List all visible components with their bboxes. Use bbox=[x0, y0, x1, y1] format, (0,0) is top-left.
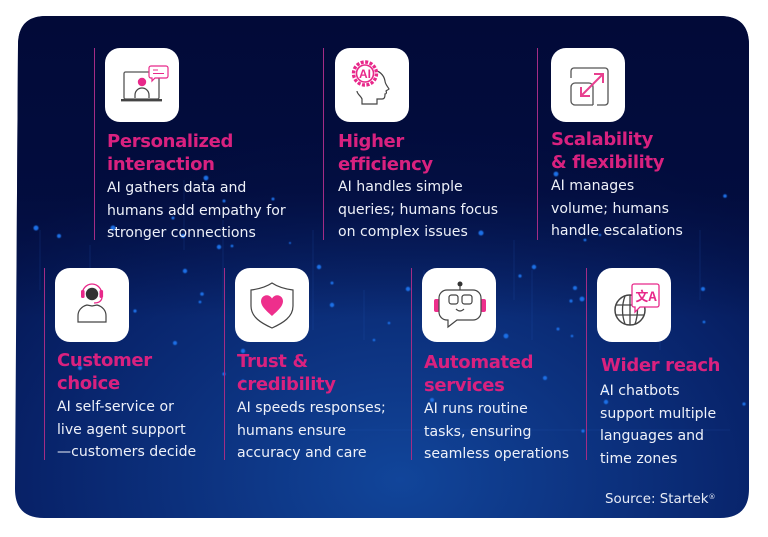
heading: efficiency bbox=[338, 154, 433, 175]
description: time zones bbox=[600, 451, 677, 467]
description bbox=[338, 179, 498, 240]
description: AI manages bbox=[551, 178, 634, 194]
icon: resize arrows bbox=[551, 48, 625, 122]
icon: globe translate bbox=[597, 268, 671, 342]
description bbox=[57, 399, 196, 460]
description: —customers decide bbox=[57, 444, 196, 460]
item: automated services bbox=[411, 268, 569, 462]
description: AI self-service or bbox=[57, 399, 174, 415]
heading bbox=[107, 131, 233, 175]
icon: chatbot bbox=[422, 268, 496, 342]
item: personalized interaction bbox=[94, 48, 286, 241]
heading: Wider reach bbox=[601, 355, 720, 376]
heading: choice bbox=[57, 373, 120, 394]
item: wider reach bbox=[586, 268, 720, 467]
icon: headset agent bbox=[55, 268, 129, 342]
description: queries; humans focus bbox=[338, 202, 498, 218]
heading: interaction bbox=[107, 154, 215, 175]
source note: Source: Startek® bbox=[605, 492, 715, 507]
icon: video chat bbox=[105, 48, 179, 122]
icon: AI head bbox=[335, 48, 409, 122]
description bbox=[424, 401, 569, 462]
description: languages and bbox=[600, 428, 704, 444]
description: on complex issues bbox=[338, 224, 468, 240]
description: accuracy and care bbox=[237, 445, 367, 461]
description: tasks, ensuring bbox=[424, 424, 531, 440]
description: volume; humans bbox=[551, 201, 669, 217]
description bbox=[551, 178, 683, 239]
heading: services bbox=[424, 375, 504, 396]
description bbox=[107, 180, 286, 241]
item: higher efficiency bbox=[323, 48, 498, 240]
description: AI gathers data and bbox=[107, 180, 246, 196]
icon: shield heart bbox=[235, 268, 309, 342]
description: AI speeds responses; bbox=[237, 400, 386, 416]
heading: Customer bbox=[57, 350, 152, 371]
item: trust and credibility bbox=[224, 268, 386, 461]
icon: AI head: AI bbox=[359, 67, 371, 81]
heading: Trust & bbox=[237, 351, 308, 372]
heading: Automated bbox=[424, 352, 533, 373]
heading: Personalized bbox=[107, 131, 233, 152]
item: customer choice bbox=[44, 268, 196, 460]
item: scalability and flexibility bbox=[537, 48, 683, 240]
heading bbox=[551, 129, 664, 173]
description: seamless operations bbox=[424, 446, 569, 462]
description: support multiple bbox=[600, 406, 716, 422]
description: humans add empathy for bbox=[107, 203, 286, 219]
heading bbox=[338, 131, 433, 175]
icon: globe translate: 文A bbox=[635, 286, 657, 305]
description: humans ensure bbox=[237, 423, 346, 439]
heading bbox=[424, 352, 533, 396]
description: stronger connections bbox=[107, 225, 256, 241]
heading: Scalability bbox=[551, 129, 653, 150]
description: AI runs routine bbox=[424, 401, 528, 417]
description: live agent support bbox=[57, 422, 186, 438]
description bbox=[237, 400, 386, 461]
description bbox=[600, 383, 716, 467]
heading: credibility bbox=[237, 374, 336, 395]
description: AI chatbots bbox=[600, 383, 680, 399]
heading bbox=[237, 351, 336, 395]
heading: Higher bbox=[338, 131, 404, 152]
heading: & flexibility bbox=[551, 152, 664, 173]
description: AI handles simple bbox=[338, 179, 463, 195]
heading bbox=[57, 350, 152, 394]
description: handle escalations bbox=[551, 223, 683, 239]
